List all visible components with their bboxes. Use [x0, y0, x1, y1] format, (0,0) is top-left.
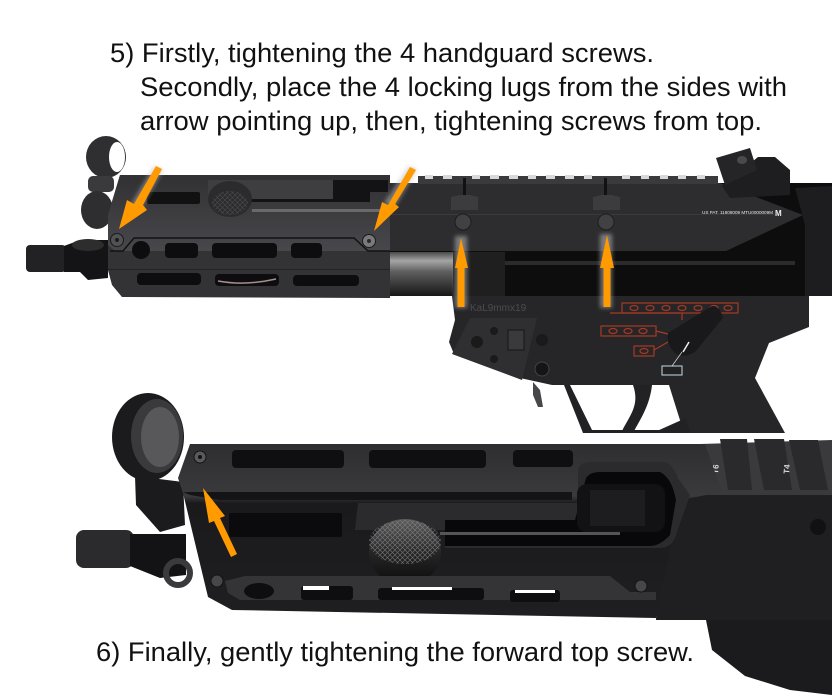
lower band — [225, 576, 656, 600]
charging slot — [250, 180, 388, 202]
bottom right lower receiver fragment — [706, 620, 832, 695]
instruction text: step 6: 6) Finally, gently tightening the forward top screw. — [96, 637, 694, 667]
muzzle — [26, 239, 108, 280]
barrel shroud — [388, 252, 453, 296]
receiver pin — [810, 519, 826, 535]
screw front — [110, 234, 124, 246]
ejection port surround — [355, 462, 690, 548]
arrow: front top screw — [119, 166, 163, 229]
lower receiver — [449, 296, 809, 433]
upper receiver black tube — [390, 183, 832, 296]
rail marking T4: T4 — [782, 464, 792, 474]
locking lug left — [451, 178, 478, 230]
charging rod — [440, 532, 620, 535]
muzzle close-up — [76, 530, 190, 585]
ejection port opening — [445, 472, 676, 546]
top screw — [194, 451, 206, 463]
magazine release plate — [452, 318, 549, 380]
bolt carrier — [577, 484, 665, 532]
arrow: forward top screw — [203, 488, 237, 557]
lower slots — [244, 583, 560, 602]
lower screw left — [211, 575, 223, 587]
rail gaps — [425, 175, 705, 179]
charging handle knob — [208, 181, 252, 217]
close-up receiver — [656, 495, 832, 620]
side slot — [229, 513, 342, 537]
step 5 second line: Secondly, place the 4 locking lugs from the sides with — [140, 72, 787, 102]
selector markings — [601, 303, 738, 356]
patent marking: US PAT. 11808009 MTU0000009M — [702, 210, 773, 215]
trigger — [622, 385, 652, 431]
rail teeth — [418, 176, 718, 184]
handguard close-up — [178, 444, 722, 618]
maker logo: M — [775, 209, 782, 218]
locking lug right — [593, 178, 620, 230]
instruction text: step 5 — [110, 38, 787, 136]
screw rear — [362, 234, 376, 248]
front sight ring close-up — [112, 393, 185, 532]
handguard — [108, 175, 390, 298]
front sight ring — [81, 136, 126, 229]
rear receiver section — [795, 186, 832, 296]
rear sight — [716, 148, 790, 198]
arrow: left locking lug — [455, 236, 468, 308]
arrow: rear top screw — [374, 166, 417, 231]
safety tab — [533, 382, 543, 407]
caliber stamp: KaL9mmx19 — [470, 303, 527, 314]
top photo: full side view of receiver with handguard — [26, 136, 832, 433]
m-lok slots row one — [132, 241, 322, 259]
arrow: right locking lug — [600, 234, 614, 308]
close-up rail — [690, 439, 832, 500]
top slots — [232, 450, 573, 468]
upper receiver panel — [385, 183, 803, 251]
lower screw right — [635, 580, 647, 592]
selector lever — [662, 306, 723, 375]
trigger guard — [564, 385, 684, 433]
recess behind charging handle — [208, 180, 333, 202]
guard rear — [657, 418, 690, 433]
m-lok slots row two — [137, 273, 359, 286]
knob close-up — [369, 519, 441, 585]
rail marking T6: T6 — [711, 464, 721, 474]
handguard upper slot — [147, 192, 200, 204]
step 5 third line: arrow pointing up, then, tightening screws from top. — [140, 106, 762, 136]
step 5 first line: 5) Firstly, tightening the 4 handguard screws. — [110, 38, 654, 68]
bottom photo: close-up of handguard — [76, 393, 832, 695]
